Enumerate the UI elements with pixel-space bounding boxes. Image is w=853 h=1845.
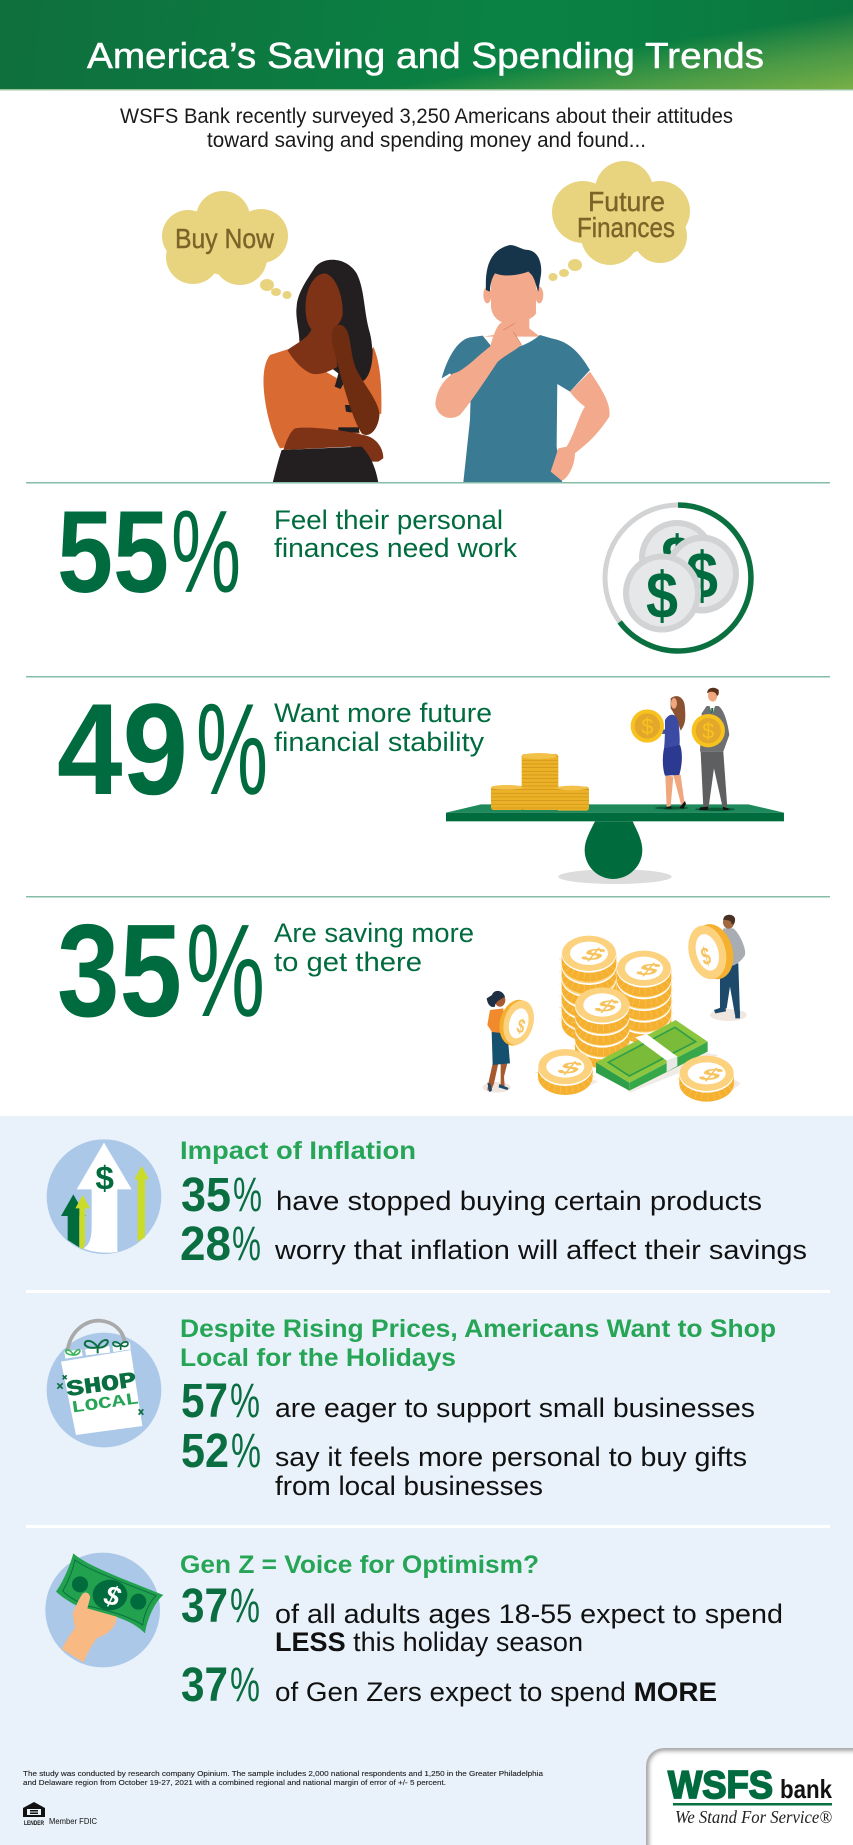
stat: 49% <box>57 676 492 822</box>
woman holding coin: $ <box>515 1015 528 1038</box>
loose coins: $ <box>552 1059 587 1077</box>
icon: coins in progress ring <box>605 505 751 651</box>
section: Shop Local <box>180 1315 776 1501</box>
illustration: woman thinking <box>263 260 383 483</box>
stat row 52%: say it feels more personal to buy gifts <box>275 1442 747 1472</box>
stat: 35% <box>57 897 474 1044</box>
thought cloud: Buy Now: Buy Now <box>175 223 275 254</box>
coin stack: back right <box>617 951 671 1043</box>
section: Impact of Inflation <box>180 1137 807 1271</box>
WSFS bank logo card: bank <box>780 1774 832 1804</box>
icon: rising arrows <box>47 1139 161 1254</box>
bag lettering: SHOP <box>65 1368 138 1403</box>
thought cloud: Future Finances: Finances <box>577 212 675 243</box>
divider lines <box>26 482 830 898</box>
man holding coin: $ <box>698 942 714 971</box>
illustration: seesaw with coins and couple <box>446 688 784 884</box>
stat: 55%: 55 <box>57 486 169 617</box>
stat row 57% <box>181 1375 755 1428</box>
stat row 37% adults: LESS this holiday season <box>275 1627 583 1657</box>
stat row 35%: % <box>233 1169 262 1222</box>
stat: 35%: Are saving more <box>274 918 474 948</box>
stat row 57%: are eager to support small businesses <box>275 1393 755 1423</box>
stat row 37% Gen Z: of Gen Zers expect to spend MORE <box>275 1677 717 1707</box>
intro text <box>120 105 733 152</box>
icon: coins in progress ring: $ <box>661 522 693 596</box>
stat row 37% adults <box>181 1580 783 1657</box>
stat: 35%: to get there <box>274 947 422 977</box>
stat: 49%: Want more future <box>274 698 492 728</box>
stat row 35%: 35 <box>181 1169 231 1222</box>
stat row 52%: from local businesses <box>275 1471 543 1501</box>
stat row 37% adults: of all adults ages 18-55 expect to spend <box>275 1599 783 1629</box>
heading: Despite Rising Prices, Americans Want to Shop <box>180 1315 776 1343</box>
stat: 35%: % <box>186 897 265 1044</box>
stat: 49%: financial stability <box>274 727 485 757</box>
icon: hand holding money: $ <box>100 1579 125 1613</box>
WSFS bank logo card <box>646 1748 853 1845</box>
WSFS bank logo card: We Stand For Service® <box>675 1807 832 1827</box>
footnote <box>23 1769 544 1787</box>
man holding coin <box>683 915 745 1018</box>
stat: 55%: finances need work <box>274 533 518 563</box>
header band <box>0 0 853 90</box>
stat row 35% <box>181 1169 762 1222</box>
section: Gen Z <box>180 1551 783 1712</box>
cash bundle <box>596 1020 708 1091</box>
coin stack: front <box>575 987 630 1068</box>
icon: shop local bag <box>47 1321 161 1447</box>
coin stack: back left <box>562 936 616 1042</box>
WSFS bank logo card: WSFS <box>668 1764 773 1807</box>
stat row 28%: 28 <box>180 1218 231 1271</box>
stat: 55% <box>57 486 518 617</box>
thought cloud: Future Finances: Future <box>588 186 665 217</box>
illustration: seesaw with coins and couple: $ <box>641 714 653 739</box>
stat: 55%: % <box>171 486 241 617</box>
coin stack: front: $ <box>589 997 624 1015</box>
stat row 37% Gen Z <box>181 1659 717 1712</box>
stat row 52%: 52 <box>181 1425 229 1478</box>
illustration: seesaw with coins and couple: $ <box>702 719 714 744</box>
stat row 57%: % <box>230 1375 260 1428</box>
intro text: WSFS Bank recently surveyed 3,250 Americans about their attitudes <box>120 105 733 128</box>
stat row 37% Gen Z: % <box>230 1659 260 1712</box>
stat row 52% <box>181 1425 747 1501</box>
illustration: coin stacks, cash and savers <box>483 915 747 1102</box>
icon: equal housing lender and member FDIC <box>23 1802 97 1827</box>
icon: hand holding money <box>45 1553 163 1667</box>
stat: 55%: Feel their personal <box>274 505 503 535</box>
icon: equal housing lender and member FDIC: LENDER <box>24 1821 45 1827</box>
heading: Gen Z = Voice for Optimism? <box>180 1551 539 1579</box>
coin stack: back left: $ <box>576 946 611 964</box>
bag lettering: LOCAL <box>70 1390 140 1419</box>
icon: coins in progress ring: $ <box>646 558 678 632</box>
stat row 37% adults: 37 <box>181 1580 228 1633</box>
stat: 35%: 35 <box>57 897 182 1044</box>
loose coins <box>538 1049 734 1102</box>
heading: Local for the Holidays <box>180 1344 456 1372</box>
icon: rising arrows: $ <box>95 1160 114 1197</box>
footnote: The study was conducted by research company Opinium. The sample includes 2,000 national respondents and 1,250 in the Greater Philadelphia <box>23 1769 544 1778</box>
loose coins: $ <box>693 1066 729 1084</box>
stat: 49%: 49 <box>57 676 188 822</box>
woman holding coin <box>487 991 539 1092</box>
stat row 37% adults: % <box>230 1580 260 1633</box>
stat row 28%: % <box>232 1218 261 1271</box>
light blue panel <box>0 1116 853 1845</box>
icon: coins in progress ring: $ <box>686 538 718 612</box>
bag lettering <box>65 1368 140 1419</box>
thought cloud: Buy Now <box>162 191 292 299</box>
heading: Impact of Inflation <box>180 1137 416 1165</box>
stat row 35%: have stopped buying certain products <box>276 1186 762 1216</box>
title: America’s Saving and Spending Trends <box>87 35 764 76</box>
white dividers <box>26 1290 830 1528</box>
intro text: toward saving and spending money and found... <box>207 129 646 152</box>
illustration: man thinking <box>435 245 610 483</box>
stat row 28% <box>180 1218 807 1271</box>
stat row 28%: worry that inflation will affect their savings <box>274 1235 807 1265</box>
coin stack: back right: $ <box>631 961 666 979</box>
footnote: and Delaware region from October 19-27, 2021 with a combined regional and national margin of error of +/- 5 percent. <box>23 1778 446 1787</box>
heading <box>180 1315 776 1372</box>
stat row 57%: 57 <box>181 1375 228 1428</box>
stat row 52%: % <box>231 1425 261 1478</box>
thought cloud: Future Finances <box>548 161 690 281</box>
stat: 49%: % <box>196 676 268 822</box>
icon: equal housing lender and member FDIC: Member FDIC <box>49 1816 97 1826</box>
stat row 37% Gen Z: 37 <box>181 1659 228 1712</box>
